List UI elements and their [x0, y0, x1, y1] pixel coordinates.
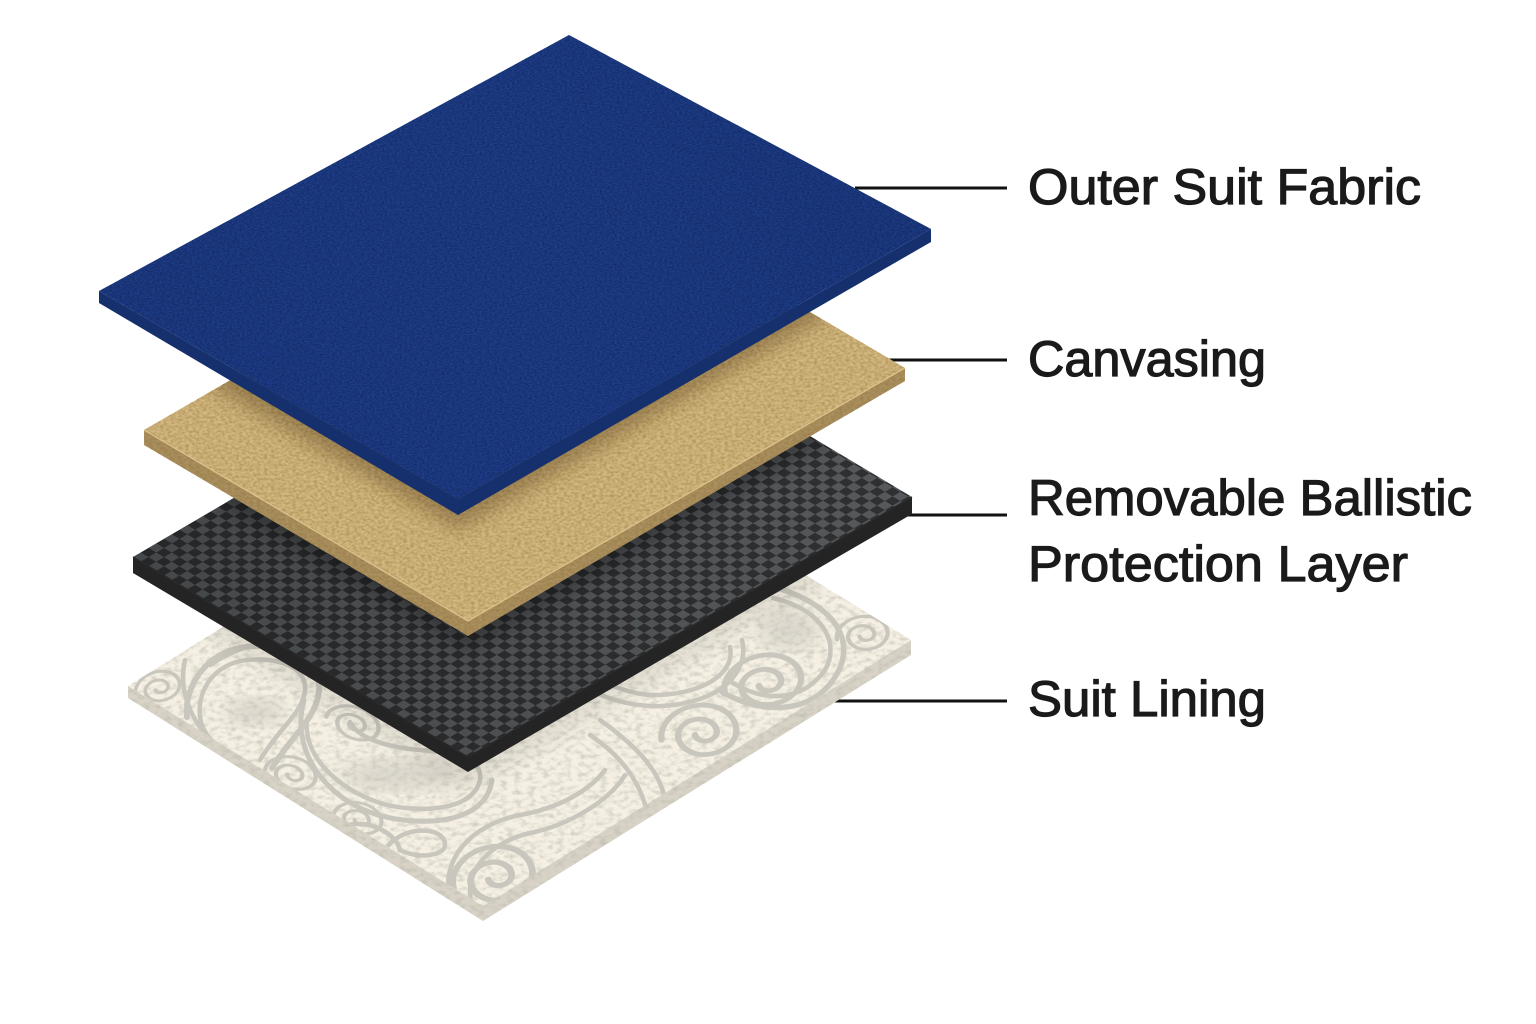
label: Removable Ballistic Protection Layer: Removable Ballistic [1028, 470, 1472, 526]
layer: outer suit fabric [99, 35, 931, 515]
label: Suit Lining: Suit Lining [1028, 671, 1266, 727]
layer: suit lining [128, 576, 911, 921]
layer: canvasing [144, 305, 906, 636]
shadow from carbon layer [208, 576, 821, 788]
paisley pattern [130, 585, 890, 912]
shadow from outer fabric [208, 306, 829, 535]
leader line: canvasing [885, 358, 1007, 362]
label: Outer Suit Fabric: Outer Suit Fabric [1028, 159, 1421, 215]
label: Canvasing: Canvasing [1028, 331, 1266, 387]
leader line: outer suit fabric [855, 186, 1007, 190]
shadow from canvasing layer [222, 436, 826, 650]
layer: removable ballistic protection [132, 436, 912, 772]
leader line: removable ballistic protection layer [900, 514, 1007, 516]
label: Removable Ballistic Protection Layer [1028, 470, 1472, 592]
label: Removable Ballistic Protection Layer: Protection Layer [1028, 536, 1408, 592]
paisley mottling [225, 610, 820, 791]
leader line: suit lining [835, 700, 1007, 702]
